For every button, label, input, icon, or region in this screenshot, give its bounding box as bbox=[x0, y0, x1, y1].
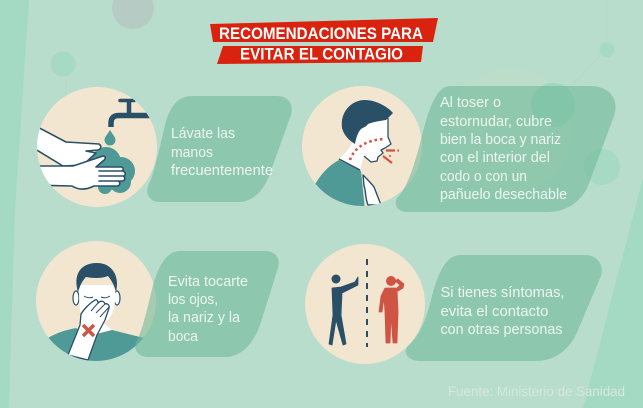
source note: Fuente: Ministerio de Sanidad bbox=[448, 383, 625, 399]
bubble bbox=[147, 96, 292, 202]
text: distancia con síntomas: evita el contacto bbox=[440, 303, 548, 320]
text: lavarse las manos: frecuentemente bbox=[171, 162, 273, 179]
icon: washing hands bbox=[30, 87, 157, 207]
text: no tocarse la cara bbox=[168, 273, 248, 345]
text: lavarse las manos bbox=[171, 125, 273, 179]
text: toser o estornudar: Al toser o bbox=[440, 94, 501, 111]
text: distancia con síntomas bbox=[440, 284, 564, 338]
icon: man touching face bbox=[36, 241, 156, 365]
text: toser o estornudar: estornudar, cubre bbox=[440, 113, 552, 130]
panel: toser o estornudar bbox=[302, 86, 616, 212]
text: distancia con síntomas: Si tienes síntomas, bbox=[440, 284, 564, 301]
text: toser o estornudar bbox=[440, 94, 567, 203]
text: no tocarse la cara: Evita tocarte bbox=[168, 273, 248, 290]
text: toser o estornudar: codo o con un bbox=[440, 168, 527, 185]
text: toser o estornudar: con el interior del bbox=[440, 149, 550, 166]
bubble bbox=[396, 86, 616, 212]
text: no tocarse la cara: boca bbox=[168, 328, 199, 345]
bubble bbox=[406, 255, 602, 361]
text: toser o estornudar: pañuelo desechable bbox=[440, 186, 567, 203]
title bbox=[210, 18, 438, 64]
panel: distancia con síntomas bbox=[305, 244, 602, 364]
bubble bbox=[135, 251, 279, 357]
title: EVITAR EL CONTAGIO bbox=[240, 44, 403, 64]
text: distancia con síntomas: con otras personas bbox=[440, 321, 562, 338]
text: lavarse las manos: manos bbox=[171, 144, 213, 161]
text: lavarse las manos: Lávate las bbox=[171, 125, 235, 142]
text: no tocarse la cara: los ojos, bbox=[168, 291, 218, 308]
text: no tocarse la cara: la nariz y la bbox=[168, 309, 241, 326]
text: toser o estornudar: bien la boca y nariz bbox=[440, 131, 561, 148]
panel: no tocarse la cara bbox=[36, 241, 279, 365]
icon: two people at a distance bbox=[305, 244, 425, 364]
title: RECOMENDACIONES PARA bbox=[219, 24, 423, 43]
panel: lavarse las manos bbox=[30, 87, 292, 207]
icon: man coughing bbox=[302, 86, 422, 210]
